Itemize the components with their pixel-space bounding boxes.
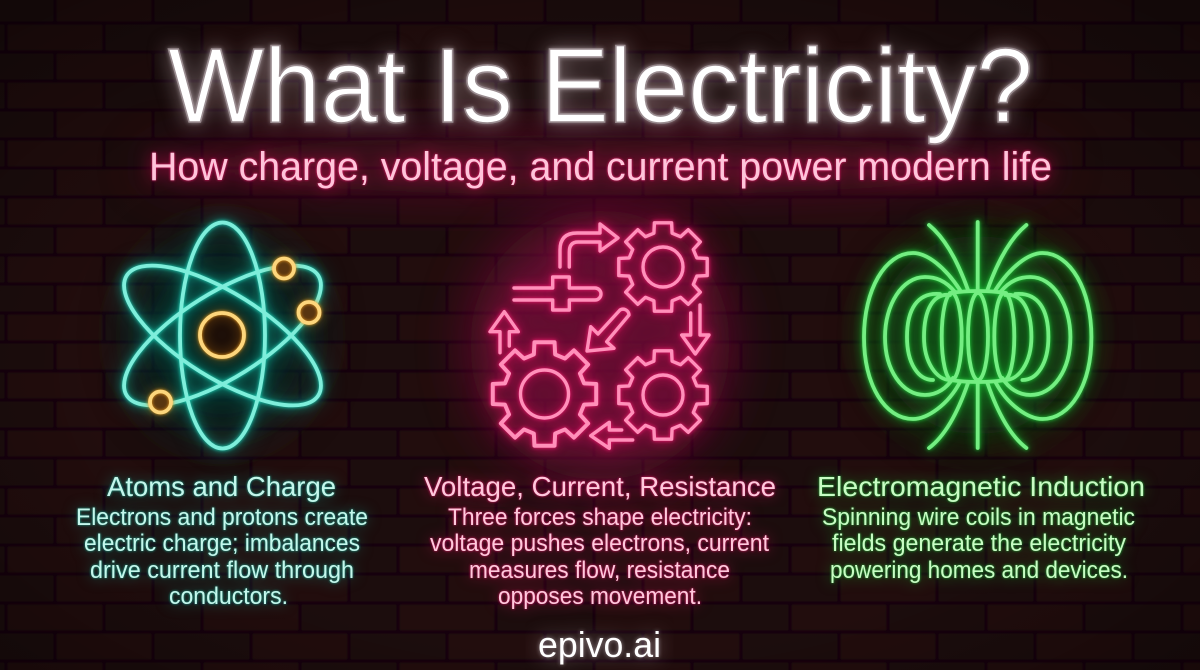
field center lines xyxy=(976,222,980,448)
text: voltage description xyxy=(430,504,769,610)
icon: gears, valve and arrows xyxy=(490,223,709,448)
panel: atoms and charge xyxy=(76,222,368,610)
panel: voltage, current, resistance xyxy=(424,223,776,610)
text: voltage description: opposes movement. xyxy=(498,583,702,610)
atom interiors xyxy=(150,258,320,412)
arrow: down xyxy=(682,305,709,354)
text: atoms description: Electrons and protons create xyxy=(76,504,368,531)
arrow: left xyxy=(591,422,633,448)
arrow: bent pipe xyxy=(560,224,618,267)
icon: valve pipe xyxy=(514,277,601,310)
heading: electromagnetic induction: Electromagnetic Induction xyxy=(817,471,1145,502)
text: atoms description xyxy=(76,504,368,610)
arrow: up xyxy=(490,312,518,353)
heading: atoms and charge: Atoms and Charge xyxy=(107,471,336,502)
icon: atom xyxy=(104,222,341,448)
heading: voltage, current, resistance: Voltage, Current, Resistance xyxy=(424,471,776,502)
gear bottom right xyxy=(619,351,707,439)
coil center loops xyxy=(942,291,1014,382)
text: voltage description: measures flow, resistance xyxy=(469,557,730,584)
text: voltage description: Three forces shape electricity: xyxy=(448,504,752,531)
text: induction description xyxy=(822,504,1135,584)
text: induction description: Spinning wire coils in magnetic xyxy=(822,504,1135,531)
gear top right xyxy=(619,223,707,311)
arrow: diagonal xyxy=(587,309,629,351)
gear bottom left xyxy=(493,342,596,446)
text: induction description: powering homes and devices. xyxy=(830,557,1128,584)
atom nucleus and electrons xyxy=(150,258,320,412)
subtitle: How charge, voltage, and current power modern life xyxy=(149,145,1052,189)
text: atoms description: conductors. xyxy=(169,583,288,610)
text: atoms description: electric charge; imbalances xyxy=(84,530,360,557)
footer: brand: epivo.ai xyxy=(538,624,661,665)
text: induction description: fields generate the electricity xyxy=(832,530,1126,557)
atom orbits xyxy=(104,222,341,448)
icon: magnetic field coil xyxy=(864,222,1091,448)
text: atoms description: drive current flow through xyxy=(90,557,354,584)
field lines left xyxy=(864,225,968,448)
text: voltage description: voltage pushes electrons, current xyxy=(430,530,769,557)
title: What Is Electricity? xyxy=(168,27,1033,145)
field lines right xyxy=(987,225,1091,448)
panel: electromagnetic induction xyxy=(817,222,1145,584)
